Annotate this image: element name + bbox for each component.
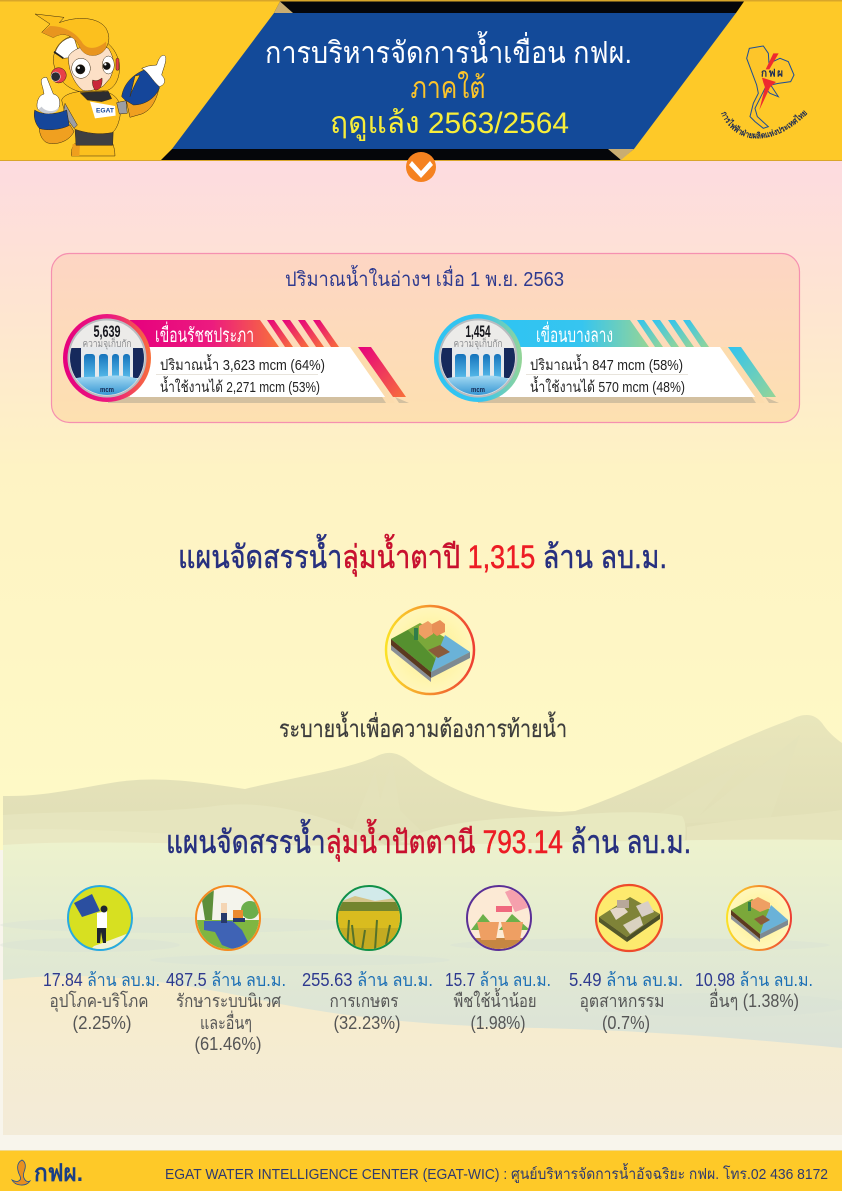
stat: consumption: 17.84 ล้าน ลบ.ม.	[43, 970, 160, 990]
stat: ecosystem: และอื่นๆ	[200, 1010, 252, 1033]
stat: others: 10.98 ล้าน ลบ.ม.	[695, 970, 813, 990]
icon: low water crops	[467, 885, 535, 952]
header banner	[0, 0, 842, 161]
mascot hands	[37, 77, 60, 113]
stat: industry	[569, 970, 683, 1033]
stat: ecosystem	[166, 970, 286, 1054]
header blue panel	[172, 13, 736, 149]
dam gauge: ความจุเก็บกัก	[454, 336, 502, 350]
dam gauge	[434, 314, 522, 402]
title: ฤดูแล้ง 2563/2564	[330, 107, 569, 141]
dam gauge: ความจุเก็บกัก	[82, 336, 132, 350]
mascot head	[51, 35, 120, 92]
stat: consumption: อุปโภค-บริโภค	[50, 990, 148, 1012]
EGAT Thailand map logo	[721, 46, 808, 139]
icon: others	[727, 886, 791, 950]
header black band bottom	[161, 149, 634, 160]
landscape: lake	[0, 839, 842, 1060]
icon: ecosystem	[196, 886, 260, 950]
dam card: Bang Lang	[434, 314, 779, 403]
dam figures: ปริมาณน้ำ 847 mcm (58%)	[530, 354, 683, 374]
dam figures: ปริมาณน้ำ 3,623 mcm (64%)	[160, 354, 325, 374]
stat: low water crops: 15.7 ล้าน ลบ.ม.	[445, 970, 551, 990]
panel: reservoir volume	[52, 254, 800, 422]
dam card: Rajjaprabha	[63, 314, 409, 403]
stat: industry: 5.49 ล้าน ลบ.ม.	[569, 970, 683, 990]
header black band top	[274, 2, 744, 13]
stat: low water crops	[445, 970, 551, 1033]
dam gauge: mcm	[471, 387, 485, 394]
footer logo	[12, 1160, 83, 1187]
panel heading: ปริมาณน้ำในอ่างฯ เมื่อ 1 พ.ย. 2563	[285, 265, 564, 291]
dam gauge: 1,454	[466, 322, 491, 341]
icon: consumption	[68, 886, 135, 950]
dam gauge: 5,639	[94, 322, 120, 341]
stat: ecosystem: (61.46%)	[194, 1034, 262, 1054]
mascot	[34, 14, 166, 156]
footer logo: กฟผ.	[34, 1160, 83, 1187]
title: การบริหารจัดการน้ำเขื่อน กฟผ.	[265, 31, 632, 70]
icon: industry	[596, 885, 662, 951]
dam gauge	[63, 314, 151, 402]
stat: industry: (0.7%)	[602, 1013, 650, 1033]
heading: Pattani basin allocation: แผนจัดสรรน้ำลุ่มน้ำปัตตานี 793.14 ล้าน ลบ.ม.	[166, 819, 691, 862]
stat: others	[695, 970, 813, 1011]
dam card: Bang Lang: น้ำใช้งานได้ 570 mcm (48%)	[530, 376, 685, 396]
title: ภาคใต้	[410, 71, 486, 105]
stat: agriculture: (32.23%)	[334, 1013, 400, 1033]
stat: others: อื่นๆ (1.38%)	[709, 988, 799, 1011]
mascot hair	[35, 14, 109, 56]
footer	[0, 1150, 842, 1191]
stat: ecosystem: 487.5 ล้าน ลบ.ม.	[166, 970, 286, 990]
heading: Tapi basin allocation: แผนจัดสรรน้ำลุ่มน้ำตาปี 1,315 ล้าน ลบ.ม.	[178, 534, 667, 577]
dam gauge: mcm	[100, 387, 114, 394]
stat: consumption	[43, 970, 160, 1033]
dam card: Rajjaprabha: น้ำใช้งานได้ 2,271 mcm (53%)	[160, 376, 320, 396]
stat: low water crops: พืชใช้น้ำน้อย	[454, 988, 536, 1011]
mascot: EGAT	[96, 108, 114, 115]
landscape: mountains	[3, 715, 842, 860]
chevron badge	[406, 152, 436, 182]
EGAT Thailand map logo: กฟผ	[761, 68, 783, 80]
stat: low water crops: (1.98%)	[470, 1013, 526, 1033]
stat: consumption: (2.25%)	[72, 1013, 132, 1033]
dam name: เขื่อนบางลาง	[536, 321, 613, 347]
caption: downstream release: ระบายน้ำเพื่อความต้องการท้ายน้ำ	[279, 711, 567, 743]
title	[265, 31, 632, 141]
stat: ecosystem: รักษาระบบนิเวศ	[176, 991, 281, 1011]
stat: agriculture	[302, 970, 433, 1033]
icon: agriculture	[337, 886, 403, 950]
landscape: sand shore	[3, 976, 842, 1135]
logo arc text: การไฟฟ้าฝ่ายผลิตแห่งประเทศไทย	[721, 110, 808, 139]
stat: agriculture: การเกษตร	[330, 991, 399, 1011]
dam name: เขื่อนรัชชประภา	[155, 321, 254, 347]
stat: agriculture: 255.63 ล้าน ลบ.ม.	[302, 970, 433, 990]
stat: industry: อุตสาหกรรม	[580, 991, 664, 1012]
icon: Tapi downstream release	[386, 606, 474, 694]
